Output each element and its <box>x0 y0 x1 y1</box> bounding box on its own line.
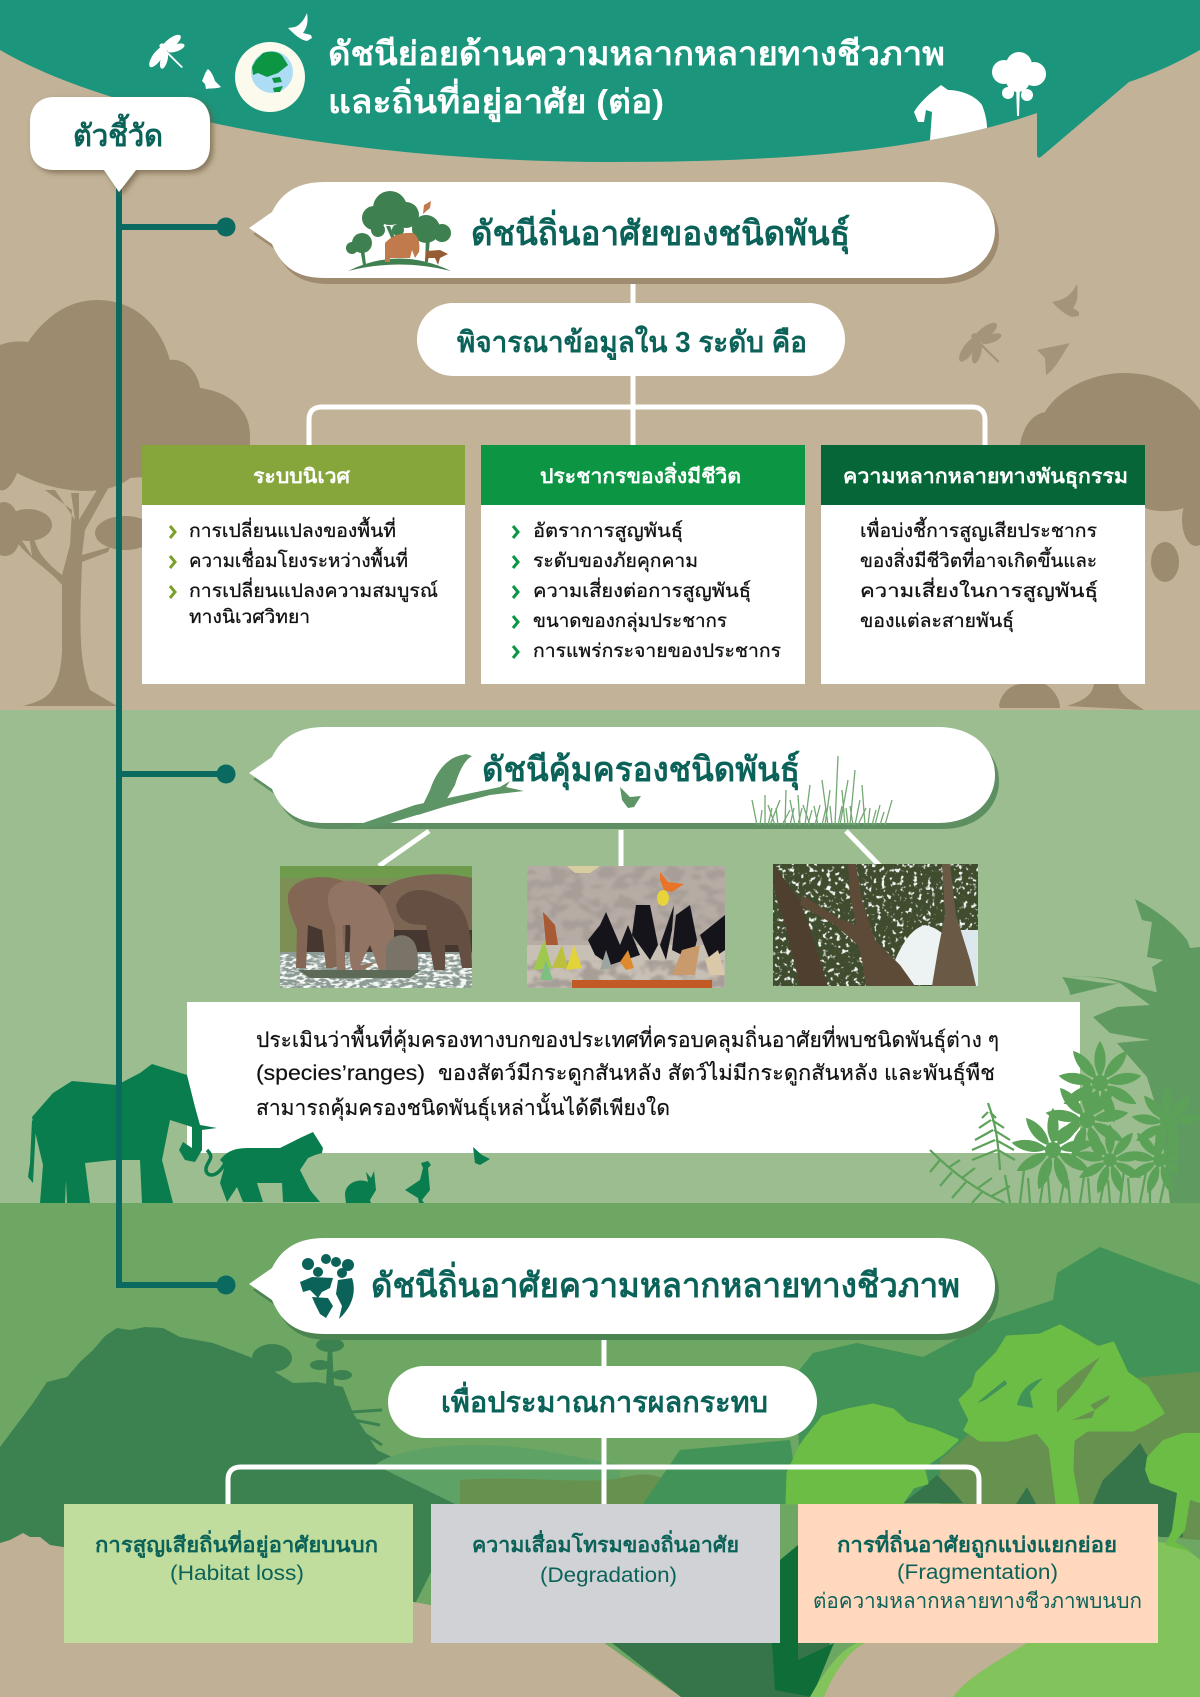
goose silhouette <box>405 1161 431 1203</box>
pill: estimate impact: เพื่อประมาณการผลกระทบ <box>441 1381 768 1419</box>
panel: description: สามารถคุ้มครองชนิดพันธุ์เหล่านั้นได้ดีเพียงใด <box>256 1093 670 1121</box>
box: habitat loss: การสูญเสียถิ่นที่อยู่อาศัยบนบก <box>95 1529 378 1559</box>
pill: three levels: พิจารณาข้อมูลใน 3 ระดับ คือ <box>457 325 807 360</box>
olive field <box>940 1372 1200 1540</box>
butterfly silhouette <box>473 1147 490 1165</box>
panel: biodiversity habitat index heading <box>249 1238 999 1340</box>
icon: bird <box>288 13 312 41</box>
birds and dragonfly silhouettes, right <box>956 284 1079 375</box>
box: fragmentation: การที่ถิ่นอาศัยถูกแบ่งแยกย่อย <box>837 1529 1117 1559</box>
icon: globe with trees <box>300 1254 354 1319</box>
panel: populations: การแพร่กระจายของประชากร <box>533 641 781 662</box>
panel: populations <box>481 445 805 684</box>
indicator bubble: ตัวชี้วัด <box>73 113 163 153</box>
connectors section 1 <box>309 278 985 445</box>
panel: ecosystem: ทางนิเวศวิทยา <box>189 607 310 628</box>
pill: three levels <box>417 303 845 376</box>
title: และถิ่นที่อยู่อาศัย (ต่อ) <box>328 78 664 123</box>
tan ground <box>0 1533 681 1697</box>
icon: grass <box>752 756 892 825</box>
right-hand hill <box>1100 1542 1200 1697</box>
title: ดัชนีย่อยด้านความหลากหลายทางชีวภาพ <box>328 35 945 72</box>
photo: tree canopy <box>773 864 978 986</box>
panel: populations: ประชากรของสิ่งมีชีวิต <box>540 461 741 488</box>
panel: species protection index heading <box>249 727 999 829</box>
panel: ecosystem: ความเชื่อมโยงระหว่างพื้นที่ <box>189 547 408 572</box>
box: fragmentation <box>798 1504 1158 1643</box>
dark forest foot <box>612 1643 830 1697</box>
panel: populations: ระดับของภัยคุกคาม <box>533 551 698 573</box>
road <box>824 1643 1027 1697</box>
panel: populations: ขนาดของกลุ่มประชากร <box>533 611 727 633</box>
timeline dot 3 <box>216 1276 236 1294</box>
chevrons <box>513 526 518 658</box>
middle hill and fields <box>375 1440 800 1504</box>
icon: dragonfly <box>146 32 186 70</box>
panel: species habitat index heading: ดัชนีถิ่นอาศัยของชนิดพันธุ์ <box>471 209 850 255</box>
panel: description: ประเมินว่าพื้นที่คุ้มครองทางบกของประเทศที่ครอบคลุมถิ่นอาศัยที่พบชนิดพันธุ์ต่าง ๆ <box>256 1025 999 1053</box>
connectors section 2 <box>379 830 880 866</box>
box: degradation <box>431 1504 780 1643</box>
panel: biodiversity habitat index heading: ดัชนีถิ่นอาศัยความหลากหลายทางชีวภาพ <box>371 1261 960 1305</box>
trees on mountain ridge <box>252 1338 382 1457</box>
banana leaves, right <box>1062 899 1200 1203</box>
box: fragmentation: ต่อความหลากหลายทางชีวภาพบนบก <box>813 1590 1142 1613</box>
elephant silhouette <box>28 1064 217 1203</box>
photo: elephants <box>280 866 472 988</box>
indicator bubble <box>30 97 210 192</box>
panel: genetic diversity: เพื่อบ่งชี้การสูญเสียประชากร <box>860 517 1097 542</box>
timeline dot 2 <box>216 764 236 784</box>
panel: genetic diversity: ความเสี่ยงในการสูญพันธุ์ <box>860 577 1098 603</box>
icon: butterfly <box>620 787 641 808</box>
right tree silhouette <box>999 373 1200 710</box>
second light-green tree <box>787 1405 957 1503</box>
panel: species protection index heading: ดัชนีคุ้มครองชนิดพันธุ์ <box>482 750 800 791</box>
dark tree shapes <box>903 1443 1183 1537</box>
panel: genetic diversity: ของแต่ละสายพันธุ์ <box>860 610 1014 633</box>
main vertical timeline <box>119 185 226 1285</box>
icon: white tree <box>992 52 1046 116</box>
panel: species habitat index heading <box>249 182 999 284</box>
connectors section 3 <box>228 1335 979 1504</box>
timeline dot 1 <box>216 218 236 236</box>
left tree silhouette <box>0 300 250 706</box>
timeline over elephant <box>116 1064 122 1203</box>
title <box>328 35 945 123</box>
panel: populations: อัตราการสูญพันธุ์ <box>533 520 683 543</box>
bottom hill <box>810 1560 1200 1697</box>
icon: forest with elephant <box>346 191 451 271</box>
large light-green tree <box>960 1326 1163 1503</box>
header banner <box>0 0 1200 162</box>
chevrons <box>170 526 175 598</box>
panel: description: ของสัตว์มีกระดูกสันหลัง สัตว์ไม่มีกระดูกสันหลัง และพันธุ์พืช <box>438 1061 995 1086</box>
panel: populations: ความเสี่ยงต่อการสูญพันธุ์ <box>533 577 751 603</box>
rabbit silhouette <box>345 1171 376 1203</box>
icon: butterfly <box>202 69 221 89</box>
panel: description: (species’ranges) <box>256 1062 425 1085</box>
panel: ecosystem <box>142 445 465 684</box>
pill: estimate impact <box>388 1366 817 1438</box>
ferns and palm foliage, right <box>930 1041 1200 1203</box>
box: habitat loss: (Habitat loss) <box>170 1562 304 1585</box>
panel: ecosystem: การเปลี่ยนแปลงความสมบูรณ์ <box>189 577 438 602</box>
third light-green tree <box>1145 1433 1200 1552</box>
icon: globe <box>235 42 305 112</box>
panel: genetic diversity: ของสิ่งมีชีวิตที่อาจเกิดขึ้นและ <box>860 547 1097 572</box>
panel: ecosystem: การเปลี่ยนแปลงของพื้นที่ <box>189 517 396 542</box>
right mountain <box>797 1247 1200 1500</box>
box: degradation: ความเสื่อมโทรมของถิ่นอาศัย <box>472 1529 739 1557</box>
panel: description <box>187 1002 1080 1153</box>
box: degradation: (Degradation) <box>540 1564 677 1587</box>
icon: bird on branch <box>346 754 524 829</box>
dark mountain left <box>0 1327 465 1604</box>
tiger silhouette <box>206 1132 323 1202</box>
foliage foot <box>772 1545 834 1697</box>
panel: genetic diversity: ความหลากหลายทางพันธุกรรม <box>843 466 1128 489</box>
photo: butterflies <box>527 866 725 988</box>
icon: white elephant <box>914 85 987 140</box>
panel: genetic diversity <box>821 445 1145 684</box>
tree gaps <box>977 1357 1110 1420</box>
box: fragmentation: (Fragmentation) <box>897 1561 1058 1584</box>
panel: ecosystem: ระบบนิเวศ <box>253 466 351 488</box>
box: habitat loss <box>64 1504 413 1643</box>
